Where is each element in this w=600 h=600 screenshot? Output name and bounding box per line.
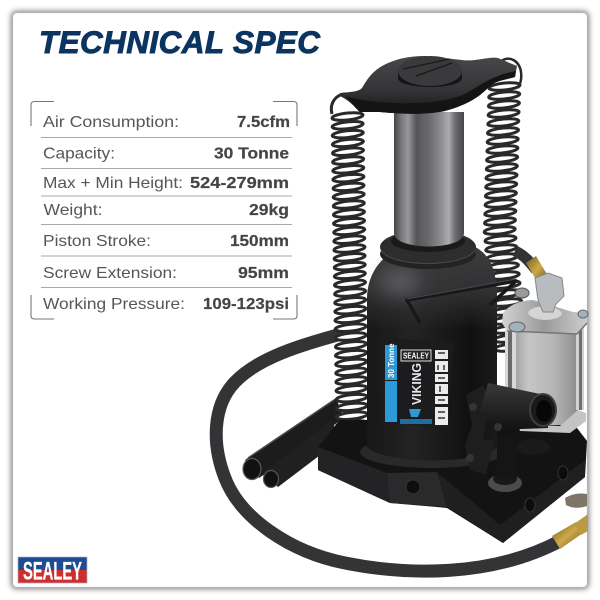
row: piston stroke: 150mm xyxy=(230,233,289,250)
air hose xyxy=(216,333,560,571)
row: screw extension: 95mm xyxy=(238,265,289,282)
steel piston xyxy=(394,112,464,246)
row: height: 524-279mm xyxy=(190,175,289,192)
row: height xyxy=(43,175,289,192)
jack collar xyxy=(380,230,476,269)
sealey logo: SEALEY xyxy=(23,558,82,586)
jack base plate xyxy=(318,420,587,543)
hose inlet and hex fitting xyxy=(515,251,564,312)
table brackets xyxy=(31,102,297,319)
pump lever socket xyxy=(465,383,556,492)
row: air consumption: 7.5cfm xyxy=(237,114,290,131)
row: working pressure: Working Pressure: xyxy=(43,296,185,313)
handle tubes xyxy=(243,398,344,488)
product label: VIKING xyxy=(409,363,424,405)
row: weight xyxy=(44,202,289,219)
air cylinder xyxy=(502,288,588,433)
row: piston stroke xyxy=(43,233,289,250)
top saddle plate xyxy=(340,56,517,114)
product label: 30 Tonne xyxy=(387,343,396,378)
left spring xyxy=(331,94,368,456)
row: piston stroke: Piston Stroke: xyxy=(43,233,151,250)
row: working pressure xyxy=(43,296,289,313)
title: TECHNICAL SPEC xyxy=(39,24,321,60)
product label: SEALEY xyxy=(403,352,430,360)
product photo: bottle jack xyxy=(216,56,588,571)
row: height: Max + Min Height: xyxy=(43,175,183,192)
row: weight: 29kg xyxy=(249,202,289,219)
saddle cap xyxy=(398,56,462,87)
row: working pressure: 109-123psi xyxy=(203,296,289,313)
body carry handle xyxy=(407,279,516,323)
row: air consumption: Air Consumption: xyxy=(43,114,179,131)
row: capacity: 30 Tonne xyxy=(214,146,289,162)
row: air consumption xyxy=(43,114,290,131)
row: weight: Weight: xyxy=(44,202,102,219)
sealey logo xyxy=(18,557,87,586)
row: capacity xyxy=(43,146,289,162)
row: capacity: Capacity: xyxy=(43,146,115,162)
hose brass coupling xyxy=(552,494,588,549)
row: screw extension: Screw Extension: xyxy=(43,265,177,282)
table row dividers xyxy=(41,138,292,288)
jack body xyxy=(360,247,504,468)
row: screw extension xyxy=(43,265,289,282)
product label xyxy=(380,337,453,427)
spec table xyxy=(31,102,297,319)
right spring xyxy=(484,59,526,351)
